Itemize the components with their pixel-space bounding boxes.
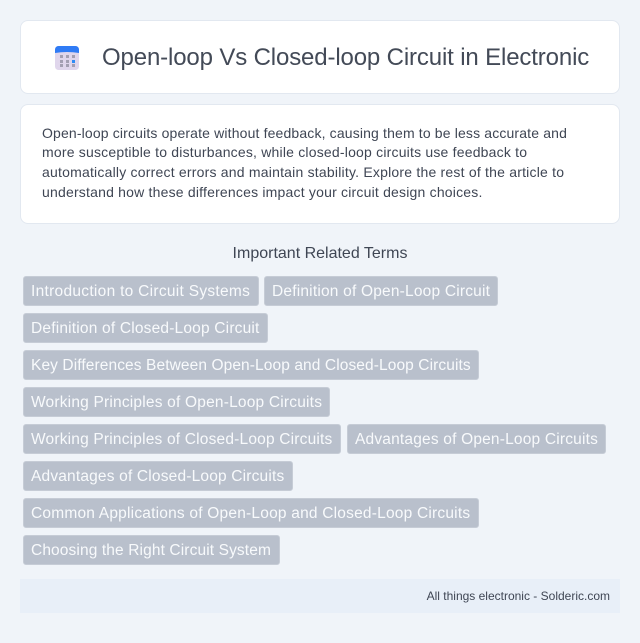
tag: Introduction to Circuit Systems (31, 283, 250, 300)
tag: Key Differences Between Open-Loop and Closed-Loop Circuits (31, 357, 471, 374)
tag (23, 461, 293, 491)
intro paragraph: automatically correct errors and maintain stability. Explore the rest of the article to (42, 164, 564, 180)
tag: Working Principles of Closed-Loop Circuits (31, 431, 332, 448)
tag (23, 498, 479, 528)
tag (23, 387, 330, 417)
tag: Definition of Closed-Loop Circuit (31, 320, 260, 337)
tag (347, 424, 606, 454)
intro paragraph: understand how these differences impact your circuit design choices. (42, 184, 483, 200)
tag: Working Principles of Open-Loop Circuits (31, 394, 322, 411)
tag: Advantages of Open-Loop Circuits (355, 431, 598, 448)
tag: Definition of Open-Loop Circuit (272, 283, 490, 300)
icon: calendar (55, 46, 79, 70)
heading: related terms: Important Related Terms (233, 245, 407, 262)
tag (23, 424, 341, 454)
intro paragraph: Open-loop circuits operate without feedback, causing them to be less accurate and (42, 125, 567, 141)
panel: introduction text (20, 104, 620, 224)
tag: Advantages of Closed-Loop Circuits (31, 468, 284, 485)
footer text: All things electronic - Solderic.com (427, 589, 610, 603)
title: Open-loop Vs Closed-loop Circuit in Electronic (102, 44, 589, 71)
tag: Choosing the Right Circuit System (31, 542, 271, 559)
tag (23, 313, 268, 343)
tag (23, 276, 259, 306)
intro paragraph: more susceptible to disturbances, while closed-loop circuits use feedback to (42, 144, 527, 160)
tag (264, 276, 498, 306)
panel: title card (20, 20, 620, 94)
intro paragraph (42, 125, 567, 200)
tag (23, 535, 280, 565)
tag: Common Applications of Open-Loop and Closed-Loop Circuits (31, 505, 470, 522)
tag (23, 350, 479, 380)
footer bar (20, 579, 620, 613)
panel: related term tags (23, 276, 606, 565)
